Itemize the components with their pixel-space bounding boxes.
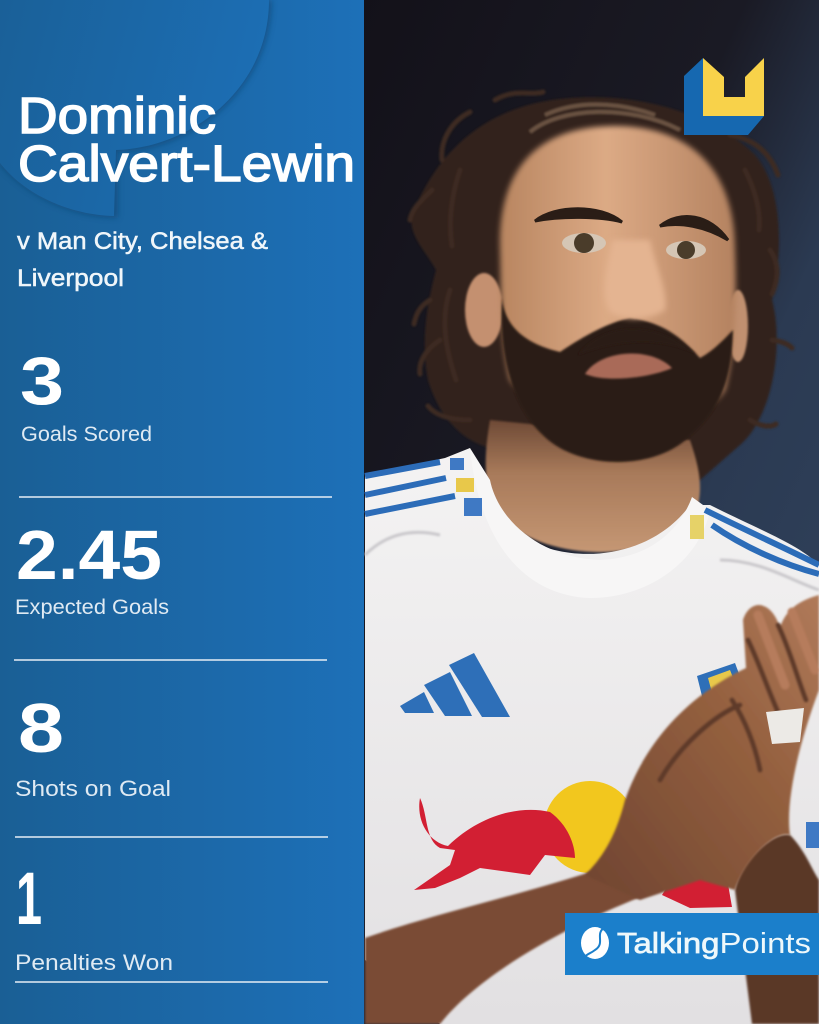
stat: goals scored: Goals Scored xyxy=(21,423,152,446)
sleeve check xyxy=(806,822,819,848)
title xyxy=(18,87,355,192)
stat: penalties won: 1 xyxy=(16,857,42,940)
talkingpoints wordmark: Talking Points xyxy=(617,928,811,960)
player nose xyxy=(605,240,665,319)
stat: shots on goal xyxy=(15,689,171,801)
stat: expected goals: Expected Goals xyxy=(15,596,169,619)
player beard xyxy=(502,298,733,462)
stat: goals scored: 3 xyxy=(20,343,64,419)
club logo xyxy=(684,58,764,135)
talkingpoints logo box xyxy=(565,913,819,975)
player ears xyxy=(465,273,748,362)
red bull logo xyxy=(414,781,636,890)
collar checks xyxy=(450,458,704,539)
shirt collar xyxy=(470,448,710,598)
stat: penalties won: Penalties Won xyxy=(15,950,173,975)
stat: penalties won xyxy=(15,857,173,975)
talkingpoints icon xyxy=(581,927,609,959)
decorative quarter circles xyxy=(0,0,272,218)
subtitle: v Man City, Chelsea & xyxy=(17,228,268,255)
stat: shots on goal: 8 xyxy=(18,689,64,767)
subtitle xyxy=(17,228,268,292)
player mouth xyxy=(585,354,672,379)
stat: goals scored xyxy=(20,343,152,446)
shoulder shading xyxy=(365,532,819,590)
player moustache xyxy=(578,329,696,355)
title: Dominic xyxy=(18,87,216,144)
subtitle: Liverpool xyxy=(17,265,124,292)
player neck xyxy=(486,420,700,552)
stat: shots on goal: Shots on Goal xyxy=(15,776,171,801)
adidas logo xyxy=(400,653,510,717)
panel: stats sidebar xyxy=(0,0,364,1024)
right arm and hands xyxy=(585,595,819,900)
lower right arm xyxy=(735,834,819,1024)
club crest xyxy=(697,663,745,708)
player hair xyxy=(410,92,792,480)
shirt red bull right xyxy=(662,850,732,908)
player shirt xyxy=(365,448,819,1024)
player face xyxy=(500,126,736,426)
player eyes and brows xyxy=(535,209,728,259)
finger ring tape xyxy=(766,708,804,744)
stat: expected goals xyxy=(15,516,169,619)
photo: player portrait xyxy=(360,0,819,1024)
title: Calvert-Lewin xyxy=(18,135,355,192)
stat: expected goals: 2.45 xyxy=(16,516,162,594)
left forearm xyxy=(365,850,690,1024)
shoulder stripes xyxy=(365,462,819,574)
